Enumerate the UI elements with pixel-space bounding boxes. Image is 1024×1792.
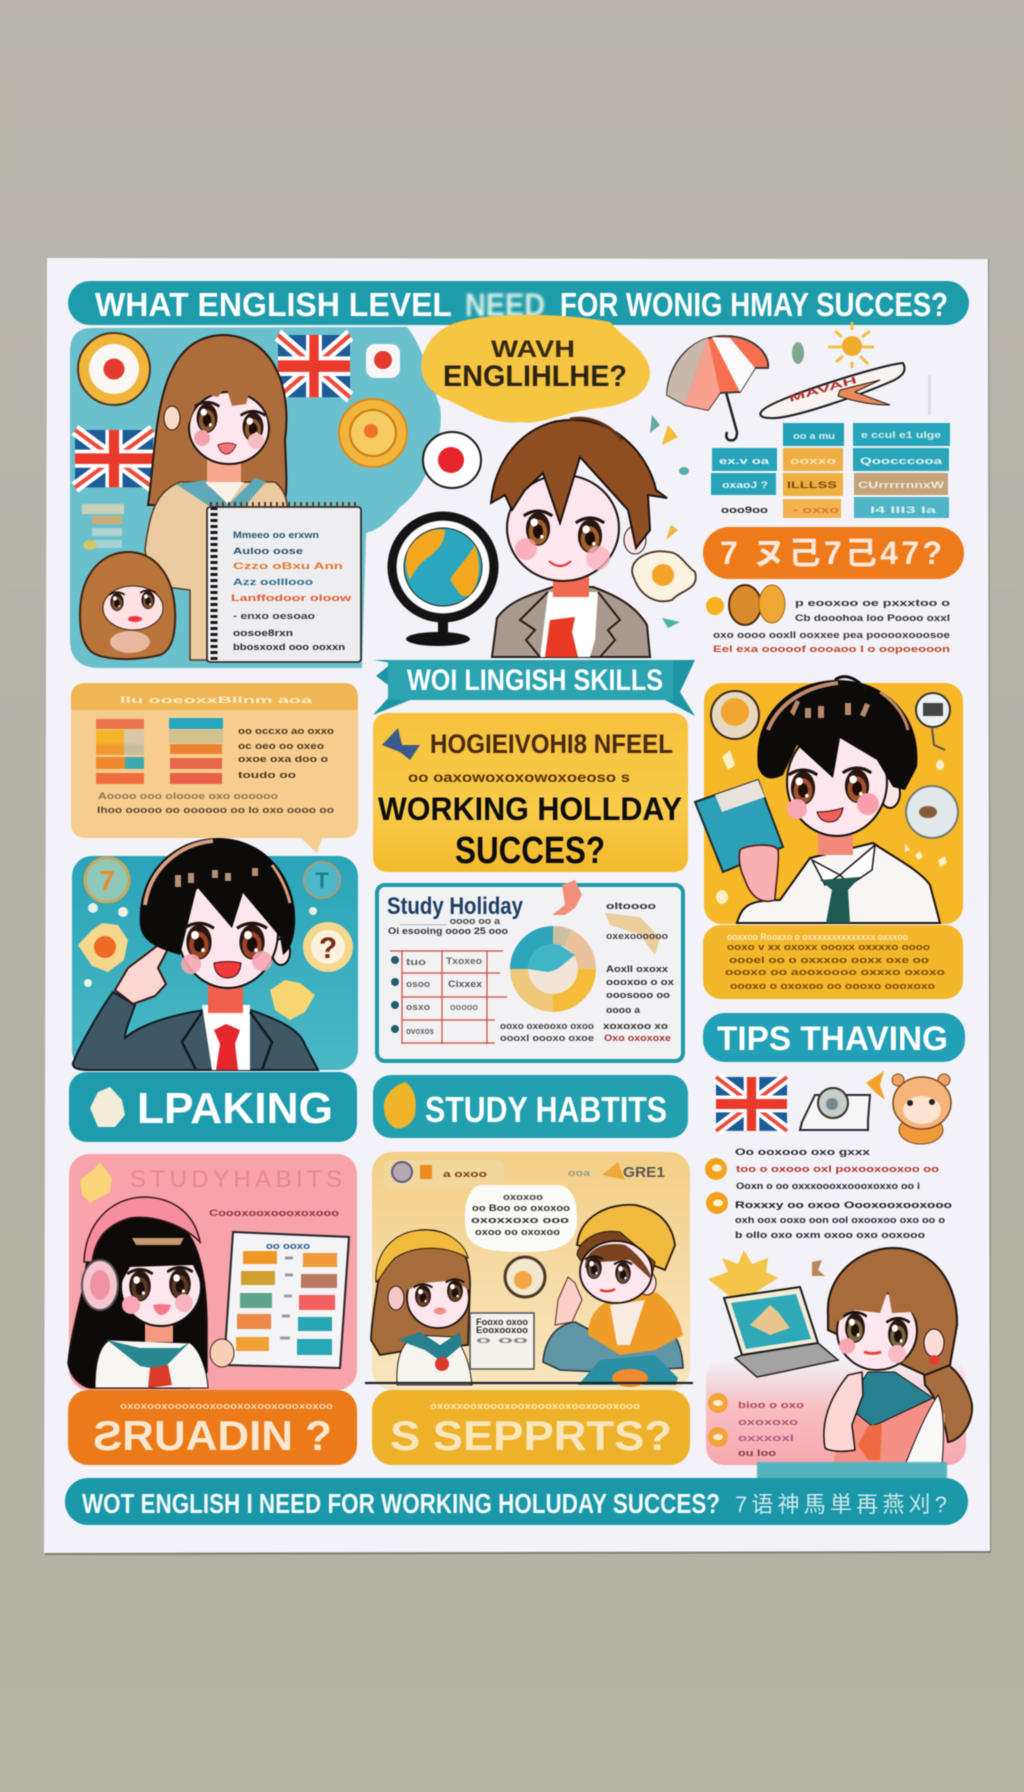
icon: question bulb <box>303 922 353 972</box>
icon: UK flag top <box>278 335 350 397</box>
icon: globe <box>392 516 494 646</box>
panel: yellow text box: oooxo oo aooxoooo oxxxo oxoxo <box>725 967 945 978</box>
character: boy in dark suit <box>73 838 318 1070</box>
icon: orange sun <box>78 923 128 972</box>
table: red grid: ooooo <box>450 1002 478 1013</box>
icon: T badge <box>304 862 340 898</box>
icon: question badge left: 7 <box>99 865 115 896</box>
icon: beach umbrella <box>667 336 768 440</box>
banner: study habits <box>373 1075 688 1138</box>
table: colored cells: I4 III3 Ia <box>870 505 937 516</box>
icon: yellow flower <box>270 980 315 1020</box>
panel: yellow text box: ooxxoo Rooxxo o oxxxxxxxxxxxxxx oxxxoo <box>727 932 908 943</box>
panel: chart speech card: Aoooo ooo oloooe oxo oooooo <box>98 791 278 802</box>
panel: pink study habits: STUDYHABITS <box>130 1166 342 1193</box>
orange heading pill: 7 ヌ己7己47? <box>720 535 942 571</box>
title bar: WHAT ENGLISH LEVEL <box>95 286 452 323</box>
text block: lower tips: oxxxoxl <box>738 1433 794 1444</box>
panel: chart speech card: oc oeo oo oxeo <box>238 741 324 752</box>
icon: orange arrow spark <box>866 1071 885 1100</box>
panel: study holiday chart card <box>377 880 683 1061</box>
chart sheet <box>224 1232 349 1368</box>
panel: central yellow heading: SUCCES? <box>455 830 605 872</box>
panel: tan conversation scene <box>365 1152 693 1390</box>
title bar: NEED <box>465 287 545 323</box>
table: colored cells <box>711 423 950 518</box>
document on table: Eooxooxoo <box>476 1325 528 1336</box>
text block: tips list: b ollo oxo oxm oxoo oxo ooxooo <box>735 1230 925 1241</box>
text block: tips list: Roxxxy oo oxoo Oooxooxooxooo <box>735 1200 952 1211</box>
panel: chart speech card: oxoe oxa doo o <box>238 754 328 765</box>
table: colored cells: ILLLSS <box>787 480 837 491</box>
panel: notebook: - enxo oesoao <box>233 611 315 622</box>
speech bubble: conversation: oxoxoo <box>503 1192 543 1203</box>
panel: notebook: oosoe8rxn <box>233 628 293 639</box>
table: red grid <box>390 951 507 1044</box>
table: colored cells: CUrrrrrnnxW <box>858 480 944 491</box>
speech bubble: what English level: WAVH <box>491 336 575 363</box>
panel: orange reading bar: oxoxooxoooxooxoooxoxooxoooxoxoo <box>120 1401 333 1412</box>
icon: sun <box>828 322 874 368</box>
speech bubble: conversation: oxoo oo oxoxoo <box>475 1227 560 1238</box>
panel: study holiday chart card: Study Holiday <box>387 893 524 920</box>
panel: notebook: bbosxoxd ooo ooxxn <box>233 642 345 653</box>
icon: hamster mascot <box>892 1074 951 1144</box>
panel: girl with laptop <box>706 1248 972 1480</box>
panel: chart speech card <box>71 683 358 853</box>
panel: study holiday chart card: Aoxll oxoxx <box>606 964 669 975</box>
character: black-haired boy <box>737 677 940 923</box>
donut chart <box>510 926 596 1012</box>
panel: notebook: Czzo oBxu Ann <box>233 561 343 572</box>
icon: airplane <box>760 363 905 418</box>
panel: yellow text box: oooxo o oxoxoo oo oooxo oooxoxo <box>730 981 935 992</box>
text block: tips list: oxh oox ooxo oon ool oxooxoo oxo oo o <box>735 1215 945 1226</box>
speech bubble: conversation: oo Boo oo oxoxoo <box>472 1203 570 1214</box>
icon: mini chart scraps <box>82 504 124 550</box>
icon: round chart badge <box>906 786 958 838</box>
banner: tips thriving <box>703 1013 965 1062</box>
panel: study holiday chart card: oooxoo o ox <box>606 977 675 988</box>
panel: notebook <box>207 505 361 662</box>
table: colored cells: - oxxo <box>793 505 839 516</box>
icon: round photo left <box>711 691 759 739</box>
text block: tips list: Oo ooxooo oxo gxxx <box>735 1147 871 1158</box>
panel: yellow text box <box>703 925 963 999</box>
icon: parrot scrap <box>792 342 804 364</box>
speech bubble: what English level: ENGLIHLHE? <box>443 360 627 393</box>
panel: chart speech card: toudo oo <box>238 770 296 781</box>
table: red grid: tuo <box>406 957 426 968</box>
icon: laptop <box>724 1287 838 1377</box>
icon: header right: ooa <box>568 1168 591 1179</box>
footer bar <box>65 1478 968 1525</box>
panel: ribbon heading: WOI LINGISH SKILLS <box>407 664 663 697</box>
table: red grid: osoo <box>406 979 430 990</box>
speech bubble: what English level <box>421 315 650 422</box>
icon: confetti scraps <box>650 415 689 628</box>
icon: Japan badge <box>78 333 150 405</box>
text block: lower tips <box>708 1393 804 1459</box>
table: colored cells: ooxxo <box>790 456 836 467</box>
text block: upper right notes: Eel exa ooooof oooaoo I o oopoeooon <box>713 644 950 655</box>
panel: study holiday chart card: oxexoooooo <box>606 931 668 942</box>
panel: boy pointing to head <box>72 838 358 1070</box>
panel: chart speech card: Ihoo ooooo oo oooooo oo lo oxo oooo oo <box>97 805 334 816</box>
icon: T badge: T <box>315 868 329 893</box>
character: brown-haired boy in suit <box>491 418 667 657</box>
speech bubble: conversation: oxoxxoxo ooo <box>471 1215 569 1226</box>
text block: tips list: too o oxooo oxl poxooxooxoo oo <box>736 1164 939 1175</box>
icon: question badge left <box>85 858 129 902</box>
panel: study holiday chart card: oooxl oooxo oxoe <box>500 1033 594 1044</box>
panel: notebook: Lanffodoor oloow <box>231 593 352 604</box>
banner: speaking: LPAKING <box>137 1084 333 1133</box>
panel: study holiday chart card: oooo a <box>606 1005 641 1016</box>
title bar <box>68 281 969 325</box>
panel: central yellow heading: HOGIEIVOHI8 NFEEL <box>430 729 673 759</box>
panel: study holiday chart card: oltoooo <box>606 901 656 912</box>
text block: lower tips: oxoxoxo <box>738 1417 798 1428</box>
chart sheet: oo ooxo <box>266 1241 310 1252</box>
icon: teal book in hand <box>695 780 783 901</box>
panel: top-left illustration <box>70 327 441 668</box>
character: girl with headphones <box>68 1197 234 1388</box>
icon: camera <box>800 1088 870 1130</box>
panel: ribbon heading <box>373 660 695 716</box>
icon: question bulb: ? <box>319 932 337 965</box>
panel: yellow text box: ooxo v xx oxoxx oooxx oxxxxo oooo <box>727 942 930 953</box>
banner: study habits: STUDY HABTITS <box>425 1089 667 1130</box>
icon: gold coin <box>339 399 407 467</box>
panel: notebook: Mmeeo oo erxwn <box>233 530 319 541</box>
icon: pink flower scrap <box>552 880 582 915</box>
table: red grid: osxo <box>406 1002 430 1013</box>
icon: small scrap <box>812 1260 825 1276</box>
panel: study holiday chart card: ooosooo oo <box>606 990 670 1001</box>
panel: central yellow heading <box>373 713 688 872</box>
text block: tips list: Ooxn o oo oxxxoooxxoooxoxxo oo i <box>736 1181 920 1192</box>
panel: chart speech card: Ilu ooeoxxBllnm aoa <box>120 695 313 706</box>
icon: Japan speech balloon <box>423 432 481 488</box>
table: colored cells: e ccul e1 ulge <box>861 430 941 441</box>
document on table: Fooxo oxoo <box>476 1317 528 1328</box>
table: red grid: ovoxos <box>406 1026 434 1037</box>
icon: crumpled note <box>90 1087 125 1127</box>
table: red grid: Cixxex <box>448 979 483 990</box>
panel: pink study habits <box>68 1154 357 1390</box>
bar chart: right column <box>169 718 223 784</box>
character: girl with cap <box>371 1230 472 1385</box>
panel: study holiday chart card: Oi esooing oooo 25 ooo <box>388 926 508 937</box>
table: colored cells: Qoocccooa <box>860 456 943 467</box>
icon: header badges <box>384 1160 504 1188</box>
table: colored cells: ex.v oa <box>719 456 770 467</box>
orange heading pill <box>703 527 964 579</box>
character: boy with yellow cap <box>543 1205 683 1387</box>
character: girl with notebook <box>145 335 288 660</box>
panel: yellow text box: oooel oo o oxxxoo ooxx oxe oo <box>729 955 929 966</box>
text block: lower tips: bioo o oxo <box>738 1400 804 1411</box>
panel: central yellow heading: WORKING HOLLDAY <box>378 791 682 827</box>
icon: small Japan flag <box>366 344 400 378</box>
icon: monitor badge <box>916 693 950 750</box>
footer bar: WOT ENGLISH I NEED FOR WORKING HOLUDAY SUCCES? <box>82 1488 720 1519</box>
footer bar: 7 语 神 馬 単 再 燕 刈 ? <box>735 1492 947 1517</box>
poster sheet <box>44 258 991 1555</box>
text block: upper right notes: oxo oooo ooxll ooxxee pea pooooxooosoe <box>713 630 950 641</box>
banner: speaking <box>69 1072 357 1142</box>
panel: notebook: Azz oolllooo <box>233 577 313 588</box>
icon: flame spark <box>80 1162 112 1203</box>
icon: UK flag left <box>75 430 153 487</box>
panel: yellow support bar <box>372 1390 690 1465</box>
icon: scribble emblem <box>382 728 420 760</box>
panel: notebook: Auloo oose <box>233 546 303 557</box>
decorative paper highlight <box>928 375 931 415</box>
icon: airplane: MAVAH <box>788 375 858 405</box>
text block: upper right notes: p eooxoo oe pxxxtoo o <box>795 598 950 609</box>
icon: header right: GRE1 <box>623 1164 665 1181</box>
panel: yellow support bar: S SEPPRTS? <box>390 1412 672 1459</box>
text block: upper right notes: Cb dooohoa loo Poooo oxxl <box>795 613 950 624</box>
icon: UK flag right <box>716 1077 787 1131</box>
title bar: FOR WONIG HMAY SUCCES? <box>560 286 948 323</box>
character: small girl <box>80 552 175 659</box>
panel: study holiday chart card: ________ oooo oo a <box>399 916 501 927</box>
icon: header right <box>568 1162 665 1181</box>
banner: tips thriving: TIPS THAVING <box>717 1020 948 1058</box>
icon: sun burst <box>708 1250 778 1312</box>
panel: pink study habits: Coooxooxoooxoxooo <box>209 1208 339 1219</box>
character: girl with ponytail <box>824 1248 972 1465</box>
text block: tips list <box>705 1147 952 1241</box>
icon: fried egg <box>632 551 696 601</box>
panel: yellow support bar: oxoxxooxoooxooxoooxoxooxoooxooo <box>430 1401 640 1412</box>
table: colored cells: ooo9oo <box>721 505 768 516</box>
icon: header badges: a oxoo <box>443 1169 487 1180</box>
panel: orange reading bar: ƧRUADIN ? <box>93 1412 332 1459</box>
document on table: o oo <box>476 1335 528 1346</box>
table: colored cells: oxaoJ ? <box>722 480 768 491</box>
panel: study holiday chart card: ooxo oxeooxo oxoo <box>500 1021 594 1032</box>
teal smudge <box>757 1462 947 1480</box>
text block: lower tips: ou loo <box>738 1448 776 1459</box>
document on table <box>470 1313 534 1369</box>
table: colored cells: oo a mu <box>793 431 835 442</box>
table: red grid: Txoxeo <box>446 956 482 967</box>
bar chart: left column <box>96 719 144 784</box>
panel: study holiday chart card: Oxo oxoxoxe <box>604 1033 671 1044</box>
panel: boy with book <box>695 677 963 924</box>
panel: study holiday chart card: xoxoxoo xo <box>603 1021 668 1032</box>
speech bubble: conversation <box>465 1185 577 1252</box>
text block: upper right notes <box>706 585 950 655</box>
panel: orange reading bar <box>68 1390 357 1465</box>
panel: central yellow heading: oo oaxowoxoxowoxoeoso s <box>408 769 630 785</box>
icon: orange mascot <box>384 1082 416 1128</box>
panel: chart speech card: oo occxo ao oxxo <box>238 726 334 737</box>
icon: egg medallion <box>505 1257 545 1297</box>
